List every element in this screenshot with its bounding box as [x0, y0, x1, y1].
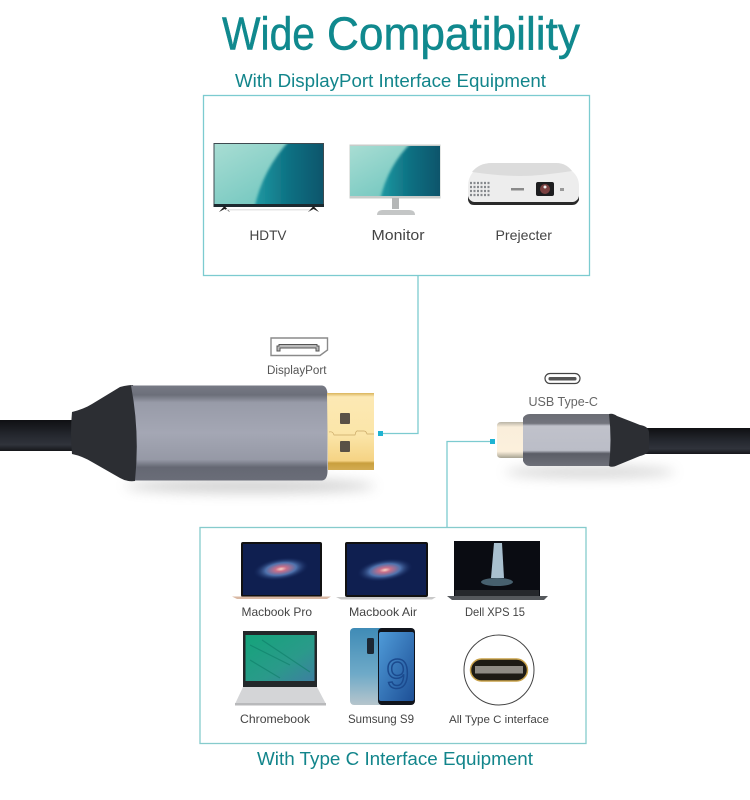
label: Samsung S9: Sumsung S9 — [348, 712, 414, 726]
connector: DisplayPort to panel — [378, 275, 418, 436]
icon: Macbook Air — [336, 542, 436, 600]
label: USB Type-C: USB Type-C — [528, 395, 598, 409]
icon: Chromebook — [235, 631, 326, 706]
connector: USB-C to panel — [447, 439, 495, 527]
label: Chromebook: Chromebook — [240, 712, 311, 726]
USB-C cable plug — [497, 414, 750, 478]
label: All Type C interface: All Type C interface — [449, 714, 549, 726]
icon: DisplayPort port — [271, 338, 328, 356]
DisplayPort cable plug — [0, 385, 375, 493]
icon: Dell XPS 15 — [447, 541, 548, 600]
label: Dell XPS 15: Dell XPS 15 — [465, 605, 525, 619]
panel: Type C devices — [200, 528, 586, 744]
title — [222, 8, 580, 60]
icon: USB-C port — [545, 374, 580, 384]
icon: HDTV — [214, 140, 330, 212]
icon: Samsung S9 — [350, 628, 415, 705]
icon: Type C port — [464, 635, 534, 705]
label: Macbook Air: Macbook Air — [349, 605, 417, 619]
icon: Macbook Pro — [232, 542, 331, 599]
panel: DisplayPort devices — [204, 96, 590, 276]
numeral 9 on phone screen: 9 — [386, 650, 409, 697]
label: projector: Prejecter — [496, 227, 552, 243]
title: Compatibility — [327, 8, 580, 60]
label: HDTV: HDTV — [250, 227, 287, 243]
label: monitor: Monitor — [372, 227, 424, 244]
title: Wide — [222, 8, 315, 60]
label: Macbook Pro: Macbook Pro — [242, 605, 312, 619]
icon: monitor — [350, 142, 445, 215]
label: DisplayPort: DisplayPort — [267, 365, 327, 377]
icon: projector — [468, 163, 579, 205]
heading: DisplayPort equipment: With DisplayPort Interface Equipment — [235, 70, 546, 91]
heading: Type C equipment: With Type C Interface Equipment — [257, 748, 533, 769]
